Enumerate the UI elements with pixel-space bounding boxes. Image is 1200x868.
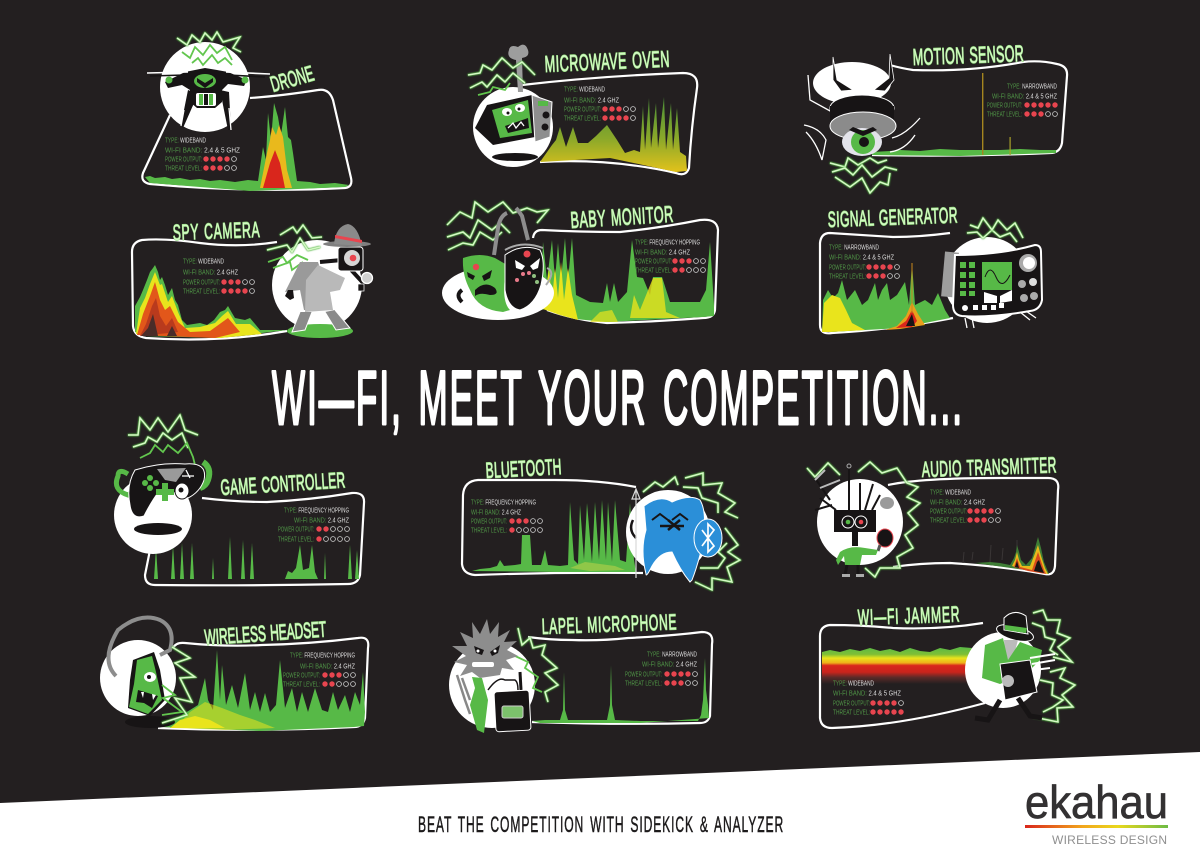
stats: lapel microphone: TYPE: NARROWBAND	[647, 652, 697, 658]
frame: spy camera	[132, 239, 287, 339]
stats: spy camera: THREAT LEVEL:	[183, 288, 220, 296]
panel: lapel microphone	[449, 609, 712, 733]
logo: ekahau: ekahau	[1025, 776, 1168, 828]
panel: baby monitor	[442, 201, 718, 323]
stats: wireless headset	[283, 652, 356, 688]
icon: signal generator	[941, 230, 1042, 328]
stats: microwave: THREAT LEVEL:	[564, 116, 601, 122]
frame: drone	[142, 90, 351, 190]
panel: microwave oven	[468, 45, 697, 174]
stats: microwave: POWER OUTPUT:	[564, 106, 601, 114]
panel: spy camera	[132, 217, 372, 339]
stats: wi-fi jammer: TYPE: WIDEBAND	[833, 680, 874, 688]
logo: ekahau: WIRELESS DESIGN	[1052, 833, 1167, 847]
stats: wi-fi jammer: POWER OUTPUT:	[833, 700, 870, 708]
icon: game controller	[114, 415, 209, 554]
lightning: signal generator top	[970, 218, 1023, 238]
stats: lapel microphone	[625, 652, 698, 688]
stats: drone: WI-FI BAND: 2.4 & 5 GHZ	[165, 148, 241, 154]
stats: wi-fi jammer	[833, 680, 904, 716]
stats: lapel microphone: WI-FI BAND: 2.4 GHZ	[642, 662, 698, 668]
panel: motion sensor	[804, 40, 1067, 193]
stats: bluetooth	[471, 500, 542, 534]
panel: signal generator	[820, 203, 1042, 333]
spectrum chart: lapel microphone	[532, 658, 709, 723]
icon: motion sensor	[804, 54, 920, 193]
panel: game controller	[114, 415, 364, 585]
stats: audio transmitter: WI-FI BAND: 2.4 GHZ	[930, 500, 986, 506]
frame: microwave	[522, 73, 697, 174]
frame: motion sensor	[872, 61, 1067, 156]
icon: wi-fi jammer spy	[965, 610, 1075, 722]
stats: bluetooth: WI-FI BAND: 2.4 GHZ	[471, 510, 522, 516]
spectrum chart: game controller	[154, 537, 359, 579]
stats: baby monitor	[635, 240, 705, 274]
heading: signal generator: SIGNAL GENERATOR	[827, 203, 958, 232]
heading: drone: DRONE	[268, 61, 317, 97]
heading: microwave: MICROWAVE OVEN	[544, 46, 670, 77]
panel: audio transmitter	[807, 452, 1058, 577]
stats: lapel microphone: POWER OUTPUT:	[625, 672, 662, 678]
stats: motion sensor: POWER OUTPUT:	[987, 102, 1022, 110]
stats: game controller: THREAT LEVEL:	[278, 536, 314, 544]
heading: wireless headset: WIRELESS HEADSET	[204, 617, 327, 650]
stats: spy camera: WI-FI BAND: 2.4 GHZ	[183, 270, 239, 276]
stats: drone: THREAT LEVEL:	[165, 166, 202, 172]
stats: microwave	[564, 86, 635, 122]
stats: wireless headset: WI-FI BAND: 2.4 GHZ	[300, 664, 356, 670]
frame: wi-fi jammer	[820, 623, 985, 728]
frame: signal generator	[820, 233, 953, 333]
icon: lapel microphone	[449, 619, 558, 733]
frame: wireless headset	[158, 638, 368, 730]
stats: baby monitor: POWER OUTPUT:	[635, 258, 672, 266]
stats: signal generator: THREAT LEVEL:	[829, 274, 866, 280]
stats: lapel microphone: THREAT LEVEL:	[625, 680, 662, 688]
stats: wireless headset: THREAT LEVEL:	[283, 682, 320, 688]
spectrum chart: audio transmitter	[963, 537, 1049, 574]
frame: game controller	[145, 493, 364, 585]
stats: baby monitor: WI-FI BAND: 2.4 GHZ	[635, 250, 691, 256]
panel: drone	[142, 32, 351, 191]
panel: bluetooth	[462, 454, 740, 590]
stats: microwave: WI-FI BAND: 2.4 GHZ	[564, 98, 620, 104]
icon: bluetooth tooth	[626, 473, 740, 590]
stats: wireless headset: POWER OUTPUT:	[283, 672, 320, 680]
stats: bluetooth: TYPE: FREQUENCY HOPPING	[471, 500, 536, 506]
stats: signal generator: POWER OUTPUT:	[829, 264, 866, 272]
frame: lapel microphone	[528, 632, 712, 724]
stats: bluetooth: THREAT LEVEL:	[471, 528, 507, 534]
spectrum chart: signal generator	[822, 263, 950, 332]
stats: motion sensor: TYPE: NARROWBAND	[1007, 84, 1057, 90]
spectrum chart: drone	[145, 103, 349, 191]
footer tagline: BEAT THE COMPETITION WITH SIDEKICK & ANALYZER	[418, 812, 783, 837]
frame: bluetooth	[462, 480, 643, 575]
stats: microwave: TYPE: WIDEBAND	[564, 86, 605, 94]
spectrum chart: bluetooth	[472, 500, 636, 572]
heading: spy camera: SPY CAMERA	[172, 217, 260, 245]
heading: lapel microphone: LAPEL MICROPHONE	[541, 609, 677, 639]
stats: drone	[165, 138, 241, 172]
stats: motion sensor: THREAT LEVEL:	[987, 112, 1022, 118]
spectrum chart: spy camera	[135, 265, 287, 338]
heading: game controller: GAME CONTROLLER	[220, 468, 346, 500]
stats: audio transmitter: THREAT LEVEL:	[930, 518, 967, 524]
stats: game controller	[278, 508, 350, 544]
stats: signal generator	[829, 244, 899, 280]
spectrum chart: microwave	[540, 97, 687, 172]
stats: audio transmitter: POWER OUTPUT:	[930, 508, 967, 516]
stats: baby monitor: TYPE: FREQUENCY HOPPING	[635, 240, 700, 246]
stats: wi-fi jammer: WI-FI BAND: 2.4 & 5 GHZ	[833, 690, 902, 698]
stats: spy camera: POWER OUTPUT:	[183, 280, 220, 286]
arrow	[632, 489, 640, 578]
frame: audio transmitter	[888, 478, 1058, 574]
stats: motion sensor: WI-FI BAND: 2.4 & 5 GHZ	[992, 94, 1058, 100]
stats: audio transmitter	[930, 490, 1000, 524]
heading: bluetooth: BLUETOOTH	[485, 454, 562, 483]
stats: wireless headset: TYPE: FREQUENCY HOPPING	[290, 652, 355, 660]
icon: audio transmitter robot	[807, 462, 920, 577]
heading: baby monitor: BABY MONITOR	[570, 201, 674, 233]
stats: drone: TYPE: WIDEBAND	[165, 138, 206, 144]
heading: motion sensor: MOTION SENSOR	[912, 40, 1024, 70]
stats: motion sensor	[987, 84, 1058, 118]
stats: game controller: TYPE: FREQUENCY HOPPING	[284, 508, 349, 514]
stats: baby monitor: THREAT LEVEL:	[635, 268, 672, 274]
spectrum chart: baby monitor	[540, 238, 714, 322]
icon: spy	[267, 224, 372, 338]
icon: microwave	[468, 45, 553, 167]
stats: audio transmitter: TYPE: WIDEBAND	[930, 490, 971, 496]
frame: baby monitor	[533, 220, 718, 323]
spectrum chart: wireless headset	[162, 650, 365, 731]
stats: spy camera: TYPE: WIDEBAND	[183, 258, 224, 266]
stats: signal generator: TYPE: NARROWBAND	[829, 244, 879, 252]
stats: bluetooth: POWER OUTPUT:	[471, 518, 507, 526]
heading: audio transmitter: AUDIO TRANSMITTER	[921, 452, 1057, 482]
spectrum chart: motion sensor	[872, 73, 1056, 156]
spectrum chart: wi-fi jammer	[822, 647, 972, 684]
icon: baby monitors	[442, 202, 554, 320]
stats: signal generator: WI-FI BAND: 2.4 & 5 GHZ	[829, 254, 895, 262]
footer band	[0, 752, 1200, 868]
stats: wi-fi jammer: THREAT LEVEL:	[833, 710, 870, 716]
panel: wireless headset	[100, 617, 368, 731]
panel: wi-fi jammer	[820, 602, 1075, 728]
stats: spy camera	[183, 258, 254, 296]
stats: game controller: POWER OUTPUT:	[278, 526, 314, 534]
stats: drone: POWER OUTPUT:	[165, 156, 202, 164]
icon: drone	[147, 32, 270, 132]
heading: wi-fi jammer: WI—FI JAMMER	[857, 602, 960, 630]
icon: wireless headset	[100, 618, 195, 728]
main title: WI—FI, MEET YOUR COMPETITION...	[272, 355, 962, 441]
stats: game controller: WI-FI BAND: 2.4 GHZ	[294, 518, 350, 524]
